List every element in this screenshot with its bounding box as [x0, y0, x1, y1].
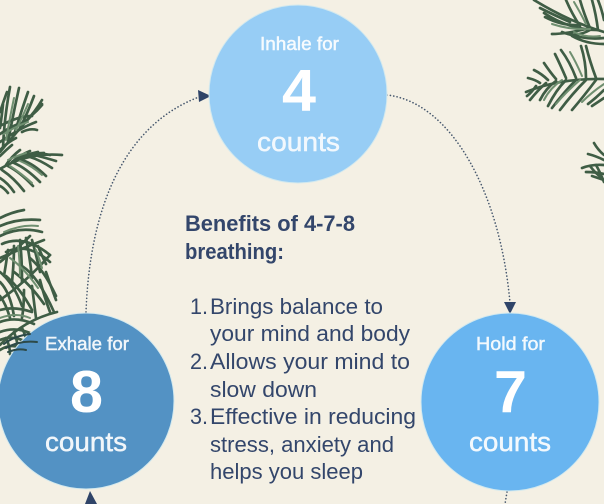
- list: benefits: Allows your mind to: [210, 349, 410, 374]
- circle: inhale: counts: [257, 127, 340, 157]
- list: benefits: [190, 294, 416, 484]
- list: benefits: helps you sleep: [210, 459, 363, 484]
- palm frond: upper right: [534, 0, 604, 44]
- list: benefits: stress, anxiety and: [210, 432, 394, 457]
- circle: hold: counts: [469, 427, 551, 457]
- circle: inhale: 4: [282, 58, 316, 124]
- list: benefits: Effective in reducing: [210, 404, 416, 429]
- circle: inhale: [209, 5, 387, 183]
- palm frond: middle right: [526, 46, 604, 110]
- list: benefits: 1.: [190, 294, 208, 319]
- circle: exhale: [0, 313, 174, 489]
- list: benefits: Brings balance to: [210, 294, 383, 319]
- heading: benefits: [185, 211, 355, 264]
- heading: benefits: Benefits of 4-7-8: [185, 211, 355, 236]
- heading: benefits: breathing:: [185, 239, 284, 264]
- arrow: into exhale circle from below: [85, 491, 97, 504]
- list: benefits: 2.: [190, 349, 208, 374]
- list: benefits: 3.: [190, 404, 208, 429]
- palm frond: upper left: [0, 87, 42, 156]
- frond tips over exhale circle: [4, 334, 37, 352]
- circle: exhale: Exhale for: [45, 334, 129, 354]
- list: benefits: slow down: [210, 377, 317, 402]
- list: benefits: your mind and body: [210, 321, 410, 346]
- palm frond: lower right: [582, 143, 604, 182]
- circle: hold: [421, 313, 599, 491]
- arrow: inhale to hold: [387, 95, 516, 314]
- palm frond: large lower left: [0, 210, 57, 354]
- arrow: exhale to inhale: [86, 90, 211, 312]
- circle: inhale: Inhale for: [260, 34, 339, 54]
- circle: hold: Hold for: [476, 334, 545, 354]
- circle: hold: 7: [494, 359, 527, 425]
- circle: exhale: 8: [70, 359, 103, 425]
- circle: exhale: counts: [45, 427, 127, 457]
- palm frond: middle left: [0, 150, 62, 193]
- arrow: hold continuing downward: [505, 492, 507, 504]
